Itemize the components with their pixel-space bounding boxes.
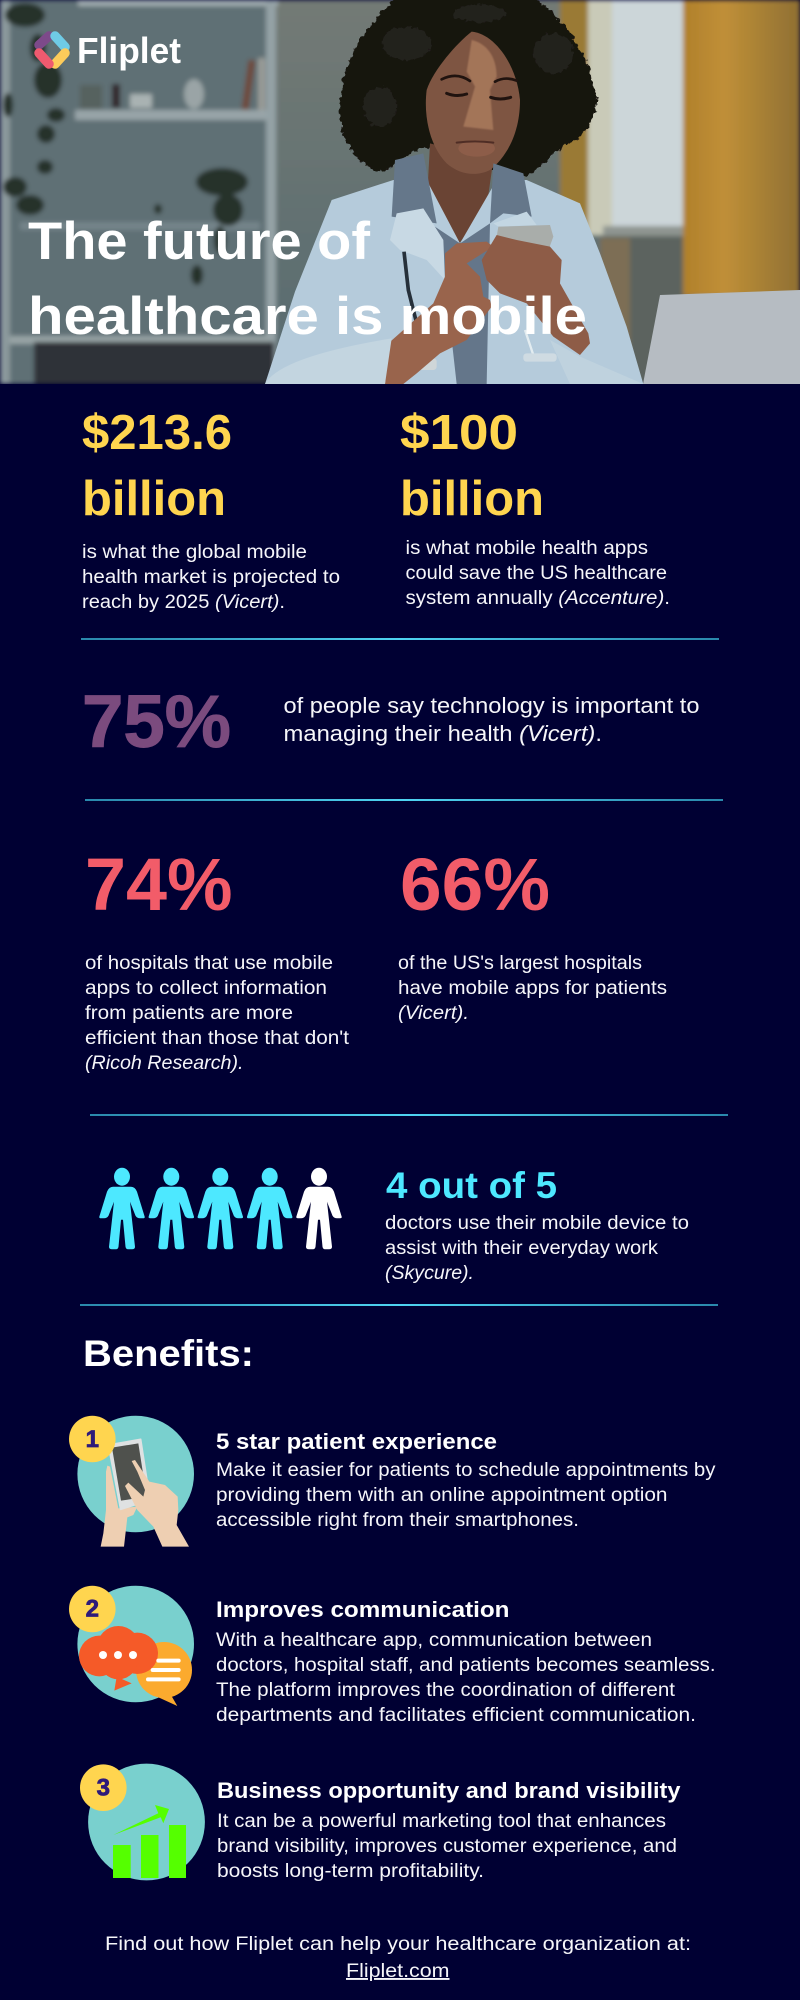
stat: $213.6 billion [82,406,340,613]
stat: $213.6 billion: reach by 2025 (Vicert). [82,592,285,613]
stat: 74%: efficient than those that don't [85,1028,350,1049]
text: benefit 2 [216,1597,716,1726]
stat: 74% [85,843,350,1074]
text: benefit 3: Business opportunity and brand visibility [217,1778,681,1803]
stat: $100 billion: is what mobile health apps [406,538,648,559]
icon: hands holding phone: 1 [86,1426,99,1453]
text: benefit 1: 5 star patient experience [216,1429,497,1454]
footer call to action: Fliplet.com [346,1961,450,1982]
footer call to action [105,1934,691,1982]
stat: 66%: have mobile apps for patients [398,978,667,999]
stat: 66%: of the US's largest hospitals [398,953,642,974]
text: benefit 1 [216,1429,716,1531]
icon: growth bar chart [80,1764,205,1880]
stat: 75%: managing their health (Vicert) . [284,721,602,746]
stat: $100 billion: could save the US healthcare [406,563,667,584]
benefit 2: Improves communication [69,1586,716,1726]
icon: logo mark [39,36,65,64]
stat: 4 out of 5: assist with their everyday work [385,1238,659,1259]
stat: 74%: apps to collect information [85,978,327,999]
doctor's coat, shirt and hands, drawn at 1/3 scale [265,153,643,384]
text: benefit 1: accessible right from their smartphones. [216,1510,579,1531]
neck and chest [427,143,493,247]
stat: $213.6 billion: is what the global mobile [82,542,307,563]
text: benefit 2: With a healthcare app, communication between [216,1630,652,1651]
text: benefit 1: providing them with an online appointment option [216,1485,668,1506]
hero photo: doctor using a smartphone [0,0,800,384]
heading: Benefits: Benefits: [83,1333,254,1374]
stat: 4 out of 5: (Skycure). [385,1263,474,1284]
stat: $213.6 billion: billion [82,472,226,526]
text: benefit 3: brand visibility, improves customer experience, and [217,1836,677,1857]
text: benefit 3: It can be a powerful marketing tool that enhances [217,1811,666,1832]
icon: speech bubbles: 2 [86,1596,99,1622]
stat: $213.6 billion: $213.6 [82,406,232,460]
text: benefit 1: Make it easier for patients to schedule appointments by [216,1460,716,1481]
title: healthcare is mobile [28,287,587,346]
icon: hands holding phone [69,1416,194,1547]
text: benefit 3: boosts long-term profitability. [217,1861,484,1882]
text: benefit 2: departments and facilitates efficient communication. [216,1705,696,1726]
logo: Fliplet [39,30,181,71]
hair [340,0,597,177]
stat: 74%: of hospitals that use mobile [85,953,333,974]
benefit 3: Business opportunity and brand visibility [80,1764,681,1882]
stat: 75% [82,680,700,763]
benefit 1: 5 star patient experience [69,1416,716,1547]
title: The future of [28,212,370,271]
text: benefit 2: Improves communication [216,1597,510,1622]
stat: $100 billion: system annually (Accenture) . [406,588,670,609]
stat: 66% [398,843,667,1024]
icon: growth bar chart: 3 [97,1774,110,1802]
footer call to action: Find out how Fliplet can help your healthcare organization at: [105,1934,691,1955]
stat: $100 billion: $100 [400,406,518,460]
text: benefit 2: doctors, hospital staff, and patients becomes seamless. [216,1655,716,1676]
stat: $100 billion [400,406,670,609]
stat: 66%: 66% [400,843,550,926]
text: benefit 2: The platform improves the coordination of different [216,1680,676,1701]
title [28,212,587,346]
icon: speech bubbles [69,1586,194,1706]
stat: $213.6 billion: health market is projected to [82,567,340,588]
icon row: 4 of 5 people highlighted [99,1168,342,1249]
stat: 74%: 74% [85,843,232,926]
stat: 74%: (Ricoh Research). [85,1053,244,1074]
stat: 4 out of 5: 4 out of 5 [386,1165,557,1206]
stat: 74%: from patients are more [85,1003,293,1024]
text: benefit 3 [217,1778,681,1882]
stat: 75%: 75% [82,680,231,763]
laptop [643,290,800,384]
stat: $100 billion: billion [400,472,544,526]
stat: 75%: of people say technology is important to [284,693,700,718]
face [426,32,520,174]
stat: 4 out of 5: doctors use their mobile device to [385,1213,689,1234]
logo wordmark: Fliplet [77,30,181,71]
window and curtains [585,0,613,235]
stat: 4 out of 5 [385,1165,689,1284]
stat: 66%: (Vicert). [398,1003,469,1024]
